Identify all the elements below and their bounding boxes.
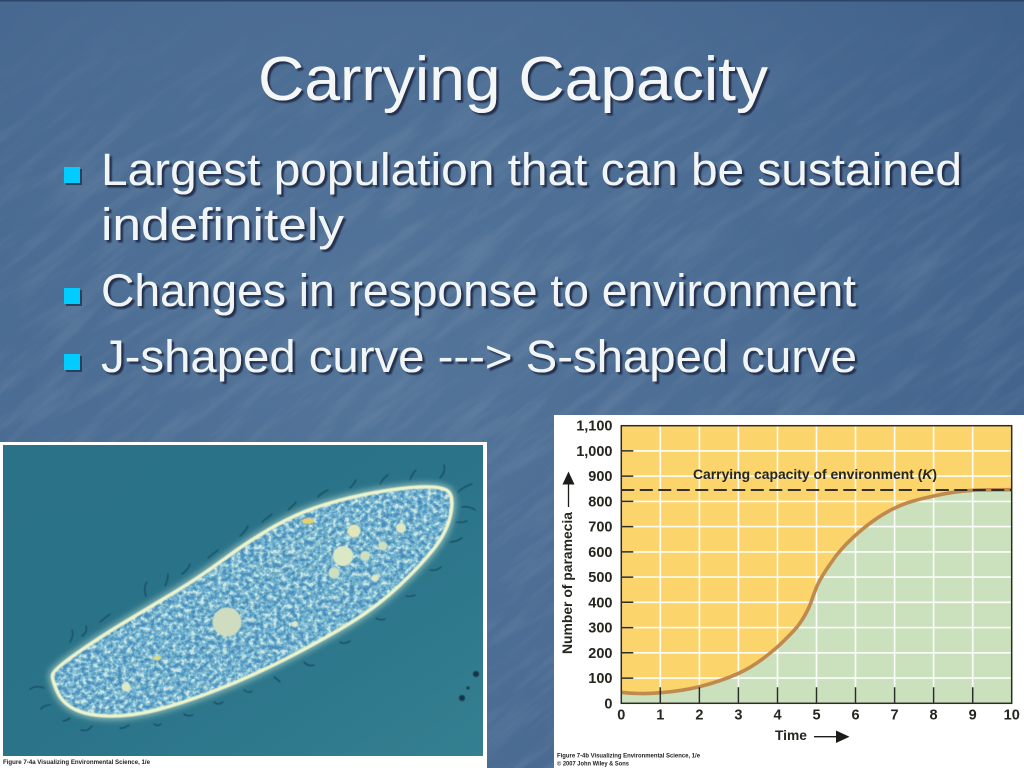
chart caption: © 2007 John Wiley & Sons — [557, 760, 630, 768]
y axis tick labels — [576, 418, 612, 712]
bullet list — [64, 144, 962, 382]
chart caption: Figure 7-4b Visualizing Environmental Science, 1/e — [557, 752, 701, 760]
carrying capacity label: Carrying capacity of environment ( K) — [693, 467, 937, 482]
title: Carrying Capacity — [258, 45, 768, 114]
x axis tick labels: 9 — [969, 708, 977, 724]
photo background — [3, 445, 483, 756]
x axis tick labels: 3 — [734, 708, 742, 724]
photo caption: Figure 7-4a Visualizing Environmental Science, 1/e — [3, 759, 150, 766]
x axis tick labels: 8 — [930, 708, 938, 724]
y axis tick labels: 300 — [588, 621, 612, 637]
y axis tick labels: 700 — [588, 520, 612, 536]
y axis title with arrow: Number of paramecia — [559, 512, 575, 654]
x axis tick labels: 5 — [812, 708, 821, 724]
x axis tick labels: 4 — [773, 708, 782, 724]
panel: carrying capacity chart — [554, 415, 1024, 768]
x axis tick labels: 6 — [851, 708, 860, 724]
y axis tick labels: 1,100 — [576, 418, 612, 434]
y axis tick labels: 400 — [588, 595, 612, 611]
gullet lines — [258, 528, 330, 578]
S-shaped population curve — [621, 490, 1012, 693]
y axis tick labels: 600 — [588, 545, 612, 561]
y axis tick labels: 100 — [588, 671, 612, 687]
bullet 1: largest population: Largest population that can be sustained — [101, 144, 962, 195]
x axis title with arrow: Time — [775, 727, 807, 743]
chart caption — [557, 752, 701, 768]
y axis tick labels: 900 — [588, 469, 612, 485]
y axis tick labels: 0 — [604, 696, 612, 712]
nucleus and vacuoles — [122, 518, 406, 692]
y axis tick labels: 500 — [588, 570, 612, 586]
cilia — [30, 465, 475, 730]
plot background — [621, 426, 1012, 703]
x axis tick labels: 7 — [891, 708, 899, 724]
bullet 1: largest population: indefinitely — [101, 199, 345, 250]
x axis tick labels — [617, 708, 1020, 724]
grid — [621, 426, 1012, 703]
paramecium cell — [30, 465, 475, 730]
halo — [52, 487, 452, 716]
y axis tick labels: 1,000 — [576, 444, 612, 460]
debris — [459, 671, 479, 701]
area under the curve — [621, 490, 1012, 703]
x axis tick labels: 1 — [656, 708, 664, 724]
bullet 2: changes in response: Changes in response to environment — [101, 265, 857, 316]
panel: paramecium photo — [0, 442, 487, 768]
y axis tick labels: 800 — [588, 494, 612, 510]
axes frame and ticks — [621, 426, 1012, 703]
x axis tick labels: 0 — [617, 708, 625, 724]
speckled interior — [54, 488, 450, 714]
membrane — [52, 487, 452, 716]
x axis tick labels: 10 — [1004, 708, 1020, 724]
carrying capacity dashed line — [621, 489, 1012, 491]
bullet 1: largest population — [64, 144, 962, 250]
y axis tick labels: 200 — [588, 646, 612, 662]
x axis title with arrow — [775, 727, 850, 743]
x axis tick labels: 2 — [695, 708, 703, 724]
bullet 3: J to S curve: J-shaped curve ---> S-shaped curve — [101, 331, 857, 382]
